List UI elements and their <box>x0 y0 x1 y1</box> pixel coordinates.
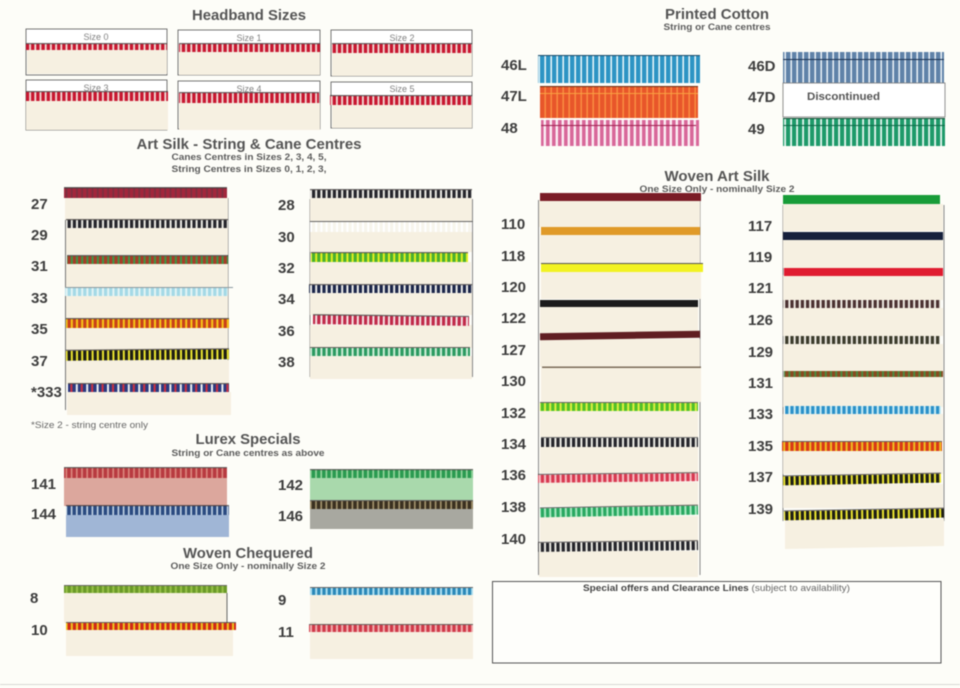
swatch 142 <box>278 469 473 500</box>
heading: Headband Sizes: Headband Sizes <box>192 7 306 24</box>
swatch 33: 33 <box>31 290 48 307</box>
swatch 35: 35 <box>31 321 48 338</box>
swatch 130: 130 <box>501 373 526 390</box>
swatch 34 <box>278 284 472 315</box>
swatch 126 <box>748 300 943 336</box>
swatch 47D discontinued: Discontinued <box>807 91 880 103</box>
heading: Woven Art Silk: Woven Art Silk <box>664 168 770 185</box>
swatch: size 2: Size 2 <box>389 33 415 43</box>
swatch: size 2 <box>331 30 472 76</box>
swatch: size 1 <box>178 30 320 75</box>
swatch 122 <box>501 300 698 333</box>
swatch: size 5 <box>330 82 472 128</box>
swatch 117: 117 <box>748 218 772 235</box>
heading: Art Silk: Art Silk - String & Cane Centres <box>136 136 362 153</box>
swatch: size 5: Size 5 <box>389 84 415 94</box>
swatch 27 <box>31 187 228 220</box>
swatch 33 <box>31 287 233 319</box>
swatch 120 <box>501 263 703 299</box>
swatch 28 <box>278 189 472 221</box>
swatch 135 <box>748 438 943 474</box>
swatch: size 4: Size 4 <box>236 84 262 94</box>
subheading: string centres: String Centres in Sizes 0, 1, 2, 3, <box>172 164 326 175</box>
subheading: one size only: One Size Only - nominally Size 2 <box>640 184 794 195</box>
swatch 136: 136 <box>501 467 526 484</box>
swatch 31: 31 <box>31 258 48 275</box>
swatch 131: 131 <box>748 375 773 392</box>
swatch 27: 27 <box>31 196 48 213</box>
swatch 32 <box>278 252 471 284</box>
swatch 120: 120 <box>501 279 526 296</box>
swatch: size 3: Size 3 <box>83 83 109 93</box>
swatch 30: 30 <box>278 229 295 246</box>
swatch 129 <box>748 336 943 371</box>
subheading: string or cane centres: String or Cane centres <box>664 22 770 33</box>
swatch 127: 127 <box>501 342 526 359</box>
panel: printed cotton <box>501 6 945 146</box>
swatch 138 <box>501 499 698 541</box>
swatch 140: 140 <box>501 531 526 548</box>
swatch 122: 122 <box>501 310 526 327</box>
swatch: size 1: Size 1 <box>236 33 262 43</box>
heading: Woven Chequered: Woven Chequered <box>183 545 313 562</box>
subheading: string or cane: String or Cane centres as above <box>172 448 324 459</box>
swatch 32: 32 <box>278 260 295 277</box>
swatch 119: 119 <box>748 249 772 266</box>
panel: special offers box <box>492 582 941 663</box>
swatch 133: 133 <box>748 406 773 423</box>
special offers text: Special offers and Clearance Lines (subject to availability) <box>583 583 850 594</box>
swatch 137 <box>748 469 943 508</box>
swatch 10: 10 <box>31 622 48 639</box>
subheading: cane centres: Canes Centres in Sizes 2, 3, 4, 5, <box>172 152 326 163</box>
swatch 333: *333 <box>31 384 62 401</box>
swatch 46D <box>748 52 944 83</box>
swatch 31 <box>31 255 228 287</box>
swatch 146: 146 <box>278 508 303 525</box>
swatch 139: 139 <box>748 501 773 518</box>
swatch 49: 49 <box>748 121 765 138</box>
panel: lurex specials <box>31 431 473 537</box>
swatch 8: 8 <box>30 590 38 607</box>
swatch 38 <box>278 347 472 379</box>
swatch 135: 135 <box>748 438 773 455</box>
swatch 38: 38 <box>278 354 295 371</box>
swatch 34: 34 <box>278 291 295 308</box>
swatch 121 <box>748 268 943 300</box>
swatch 133 <box>748 406 943 442</box>
swatch 10 <box>31 622 236 656</box>
swatch 146 <box>278 500 473 529</box>
subheading: one size only: One Size Only - nominally Size 2 <box>170 561 326 572</box>
panel: woven art silk <box>501 168 944 577</box>
swatch 137: 137 <box>748 469 773 486</box>
swatch 126: 126 <box>748 312 773 329</box>
panel: headband sizes <box>26 7 472 130</box>
swatch 36 <box>278 314 472 348</box>
swatch 35 <box>31 318 229 350</box>
swatch 141: 141 <box>31 476 56 493</box>
swatch 29 <box>31 219 228 255</box>
swatch 37 <box>31 348 229 384</box>
swatch 47D discontinued: 47D <box>748 89 776 106</box>
swatch 47D discontinued <box>748 83 945 117</box>
swatch 119 <box>748 232 943 268</box>
swatch 132: 132 <box>501 405 526 422</box>
swatch 110: 110 <box>501 216 525 233</box>
swatch 121: 121 <box>748 280 773 297</box>
swatch 46D: 46D <box>748 58 776 75</box>
swatch 117 <box>748 195 943 235</box>
swatch: size 4 <box>178 81 320 130</box>
swatch 140 <box>501 531 698 577</box>
swatch 132 <box>501 402 698 437</box>
swatch 139 <box>748 501 944 549</box>
panel: woven chequered <box>30 545 473 659</box>
heading: Printed Cotton: Printed Cotton <box>665 6 769 23</box>
swatch 46L: 46L <box>501 57 527 74</box>
swatch 129: 129 <box>748 344 773 361</box>
panel: art silk string and cane centres <box>31 136 473 431</box>
swatch 131 <box>748 371 943 407</box>
swatch 8 <box>30 585 228 623</box>
swatch 11: 11 <box>278 624 294 641</box>
swatch 141 <box>31 467 227 506</box>
swatch 29: 29 <box>31 227 48 244</box>
swatch: size 0 <box>26 29 167 75</box>
swatch 47L <box>501 86 698 118</box>
swatch 9: 9 <box>278 592 286 609</box>
swatch 36: 36 <box>278 323 295 340</box>
swatch 333 <box>31 383 231 415</box>
footnote: *Size 2 - string centre only <box>31 420 148 431</box>
swatch 134: 134 <box>501 436 527 453</box>
swatch 144: 144 <box>31 506 57 523</box>
swatch 48: 48 <box>501 120 518 137</box>
swatch 28: 28 <box>278 197 295 214</box>
swatch 49 <box>748 118 945 146</box>
swatch 134 <box>501 436 698 473</box>
swatch 130 <box>501 366 701 402</box>
swatch 127 <box>501 331 700 367</box>
swatch 118: 118 <box>501 248 525 265</box>
swatch 47L: 47L <box>501 88 527 105</box>
swatch 11 <box>278 624 473 659</box>
swatch 118 <box>501 227 700 265</box>
swatch 37: 37 <box>31 353 48 370</box>
swatch 136 <box>501 467 698 506</box>
swatch: size 0: Size 0 <box>83 32 109 42</box>
swatch 138: 138 <box>501 499 526 516</box>
heading: Lurex Specials: Lurex Specials <box>196 431 300 448</box>
swatch 9 <box>278 587 473 625</box>
swatch: size 3 <box>26 80 168 130</box>
swatch 142: 142 <box>278 477 303 494</box>
swatch 30 <box>278 221 473 252</box>
swatch 110 <box>501 193 701 233</box>
swatch 144 <box>31 505 229 537</box>
swatch 46L <box>501 55 700 83</box>
swatch 48 <box>501 120 699 146</box>
